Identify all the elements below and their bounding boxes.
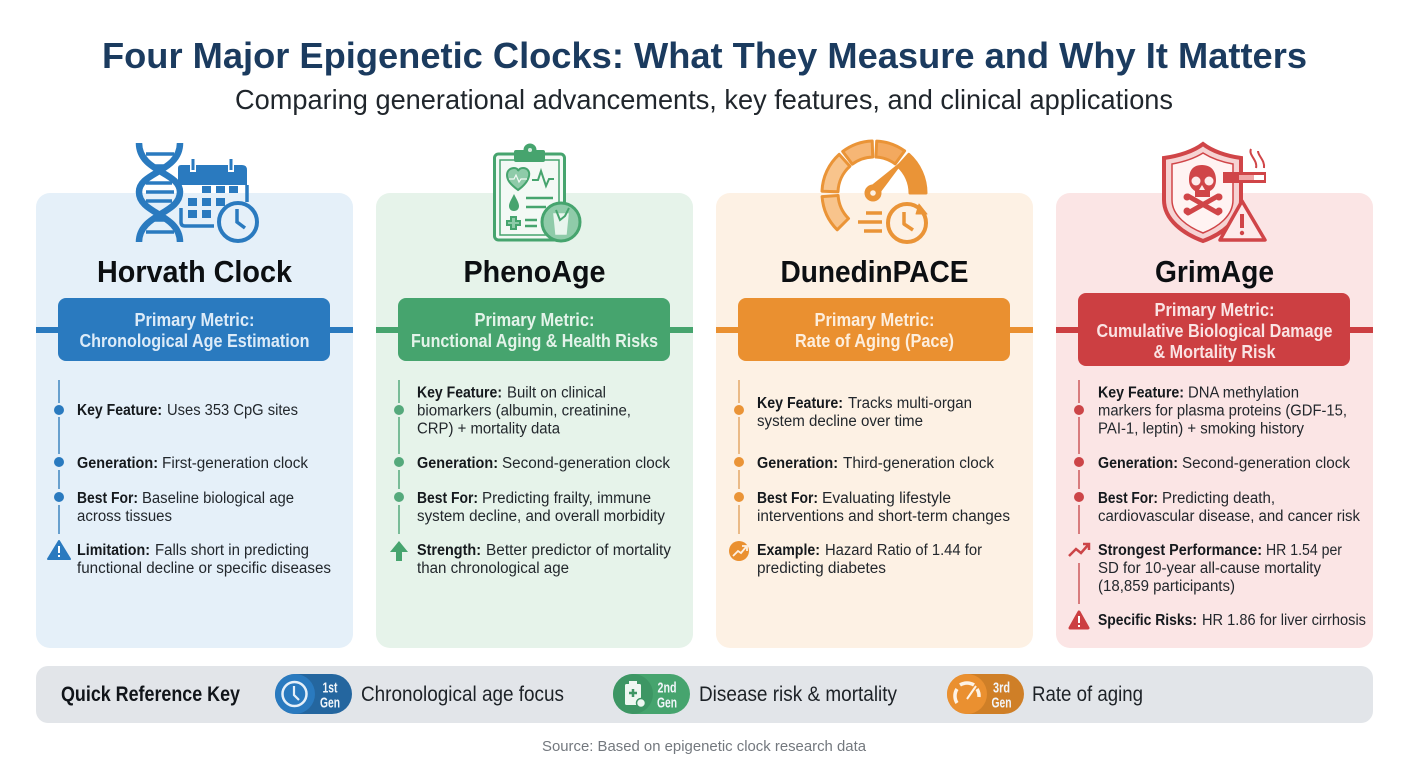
primary metric banner: Functional Aging & Health Risks (411, 331, 658, 351)
best for: Baseline biological age (142, 490, 294, 507)
key heading: Quick Reference Key (61, 683, 240, 706)
panel: Horvath Clock (36, 143, 353, 648)
badge: 1st gen: 1st (322, 680, 338, 696)
primary metric banner (716, 298, 1033, 361)
best for (77, 490, 294, 525)
best for: Best For: (77, 490, 138, 507)
strength: Strength: (417, 542, 481, 559)
specific risks (1098, 612, 1366, 629)
icon: warning triangle (48, 541, 70, 559)
key feature (757, 395, 972, 430)
generation: First-generation clock (162, 455, 308, 472)
primary metric banner: Cumulative Biological Damage (1096, 321, 1332, 341)
primary metric banner: Rate of Aging (Pace) (795, 331, 954, 351)
icon: DNA helix with calendar and clock (139, 143, 257, 242)
generation: Generation: (417, 455, 498, 472)
key feature: biomarkers (albumin, creatinine, (417, 402, 631, 420)
key label: 3rd gen: Rate of aging (1032, 683, 1143, 706)
strongest performance (1098, 542, 1342, 595)
strength (417, 542, 671, 577)
timeline (394, 380, 404, 534)
key feature (417, 384, 631, 438)
best for (1098, 490, 1360, 525)
strongest performance: SD for 10-year all-cause mortality (1098, 560, 1321, 577)
generation (1098, 455, 1350, 472)
source note: Source: Based on epigenetic clock research data (542, 738, 867, 755)
generation (417, 455, 670, 472)
badge: 2nd gen: 2nd (658, 680, 676, 696)
key feature: CRP) + mortality data (417, 420, 560, 438)
badge: 2nd gen: Gen (657, 694, 677, 712)
key background (36, 666, 1373, 723)
primary metric banner (376, 298, 693, 361)
key feature (77, 402, 298, 419)
timeline (54, 380, 64, 534)
strongest performance: (18,859 participants) (1098, 578, 1235, 595)
title: Four Major Epigenetic Clocks: What They Measure and Why It Matters (102, 35, 1307, 76)
panel: DunedinPACE (716, 141, 1033, 648)
example: predicting diabetes (757, 560, 886, 577)
example: Hazard Ratio of 1.44 for (825, 542, 982, 559)
best for: interventions and short-term changes (757, 508, 1010, 525)
badge: 2nd gen (613, 674, 690, 714)
icon: warning triangle (1070, 612, 1088, 628)
clock name: PhenoAge (464, 254, 606, 289)
key label: 1st gen: Chronological age focus (361, 683, 564, 706)
key feature: system decline over time (757, 413, 923, 430)
key feature: Built on clinical (507, 384, 606, 402)
strongest performance: Strongest Performance: (1098, 542, 1262, 559)
primary metric banner: Primary Metric: (814, 310, 934, 330)
key feature: Key Feature: (1098, 384, 1184, 402)
key feature: Key Feature: (417, 384, 502, 402)
best for: Predicting death, (1162, 490, 1275, 507)
best for: Best For: (1098, 490, 1158, 507)
icon: speedometer with clock (822, 141, 927, 242)
best for: Evaluating lifestyle (822, 490, 951, 507)
key feature: Key Feature: (77, 402, 162, 419)
generation: Second-generation clock (502, 455, 670, 472)
primary metric banner: & Mortality Risk (1154, 342, 1276, 362)
badge: 1st gen: Gen (320, 694, 340, 712)
generation: Generation: (1098, 455, 1178, 472)
best for: across tissues (77, 508, 172, 525)
primary metric banner: Chronological Age Estimation (80, 331, 310, 351)
clock name: Horvath Clock (97, 254, 293, 289)
subtitle: Comparing generational advancements, key features, and clinical applications (235, 84, 1173, 115)
timeline (1074, 380, 1084, 604)
icon: shield with skull, cigarette and warning (1164, 144, 1266, 241)
best for: Best For: (417, 490, 478, 507)
key feature: PAI-1, leptin) + smoking history (1098, 420, 1304, 438)
limitation: Limitation: (77, 542, 150, 559)
specific risks: Specific Risks: (1098, 612, 1197, 629)
panel background (36, 193, 353, 648)
panel background (376, 193, 693, 648)
best for: cardiovascular disease, and cancer risk (1098, 508, 1360, 525)
badge: 3rd gen: Gen (992, 694, 1012, 712)
key feature: Uses 353 CpG sites (167, 402, 298, 419)
badge: 1st gen (275, 674, 352, 714)
panel: PhenoAge (376, 144, 693, 648)
icon: trend badge (729, 541, 749, 561)
best for: system decline, and overall morbidity (417, 508, 665, 525)
icon: clipboard with health symbols (494, 144, 580, 241)
icon: up arrow (390, 541, 408, 561)
key feature: Key Feature: (757, 395, 843, 412)
example (757, 542, 982, 577)
limitation: Falls short in predicting (155, 542, 309, 559)
generation: Generation: (77, 455, 158, 472)
generation: Second-generation clock (1182, 455, 1350, 472)
badge: 3rd gen: 3rd (993, 680, 1010, 696)
generation (757, 455, 994, 472)
key feature: DNA methylation (1188, 384, 1299, 402)
primary metric banner: Primary Metric: (134, 310, 254, 330)
timeline (734, 380, 744, 534)
key label: 2nd gen: Disease risk & mortality (699, 683, 897, 706)
icon: trend arrow (1069, 544, 1089, 556)
clock name: DunedinPACE (780, 254, 968, 289)
generation: Third-generation clock (843, 455, 994, 472)
key feature (1098, 384, 1347, 438)
best for: Best For: (757, 490, 818, 507)
strength: Better predictor of mortality (486, 542, 671, 559)
best for: Predicting frailty, immune (482, 490, 651, 507)
key feature: markers for plasma proteins (GDF-15, (1098, 402, 1347, 420)
example: Example: (757, 542, 820, 559)
panel background (716, 193, 1033, 648)
generation: Generation: (757, 455, 838, 472)
clock name: GrimAge (1155, 254, 1274, 289)
key feature: Tracks multi-organ (848, 395, 972, 412)
primary metric banner (1056, 293, 1373, 366)
panel: quick reference key (36, 666, 1373, 723)
strongest performance: HR 1.54 per (1266, 542, 1342, 559)
panel background (1056, 193, 1373, 648)
specific risks: HR 1.86 for liver cirrhosis (1202, 612, 1366, 629)
best for (757, 490, 1010, 525)
limitation (77, 542, 331, 577)
best for (417, 490, 665, 525)
limitation: functional decline or specific diseases (77, 560, 331, 577)
primary metric banner: Primary Metric: (474, 310, 594, 330)
primary metric banner (36, 298, 353, 361)
generation (77, 455, 308, 472)
panel: GrimAge (1056, 144, 1373, 648)
badge: 3rd gen (947, 674, 1024, 714)
strength: than chronological age (417, 560, 569, 577)
primary metric banner: Primary Metric: (1154, 300, 1274, 320)
